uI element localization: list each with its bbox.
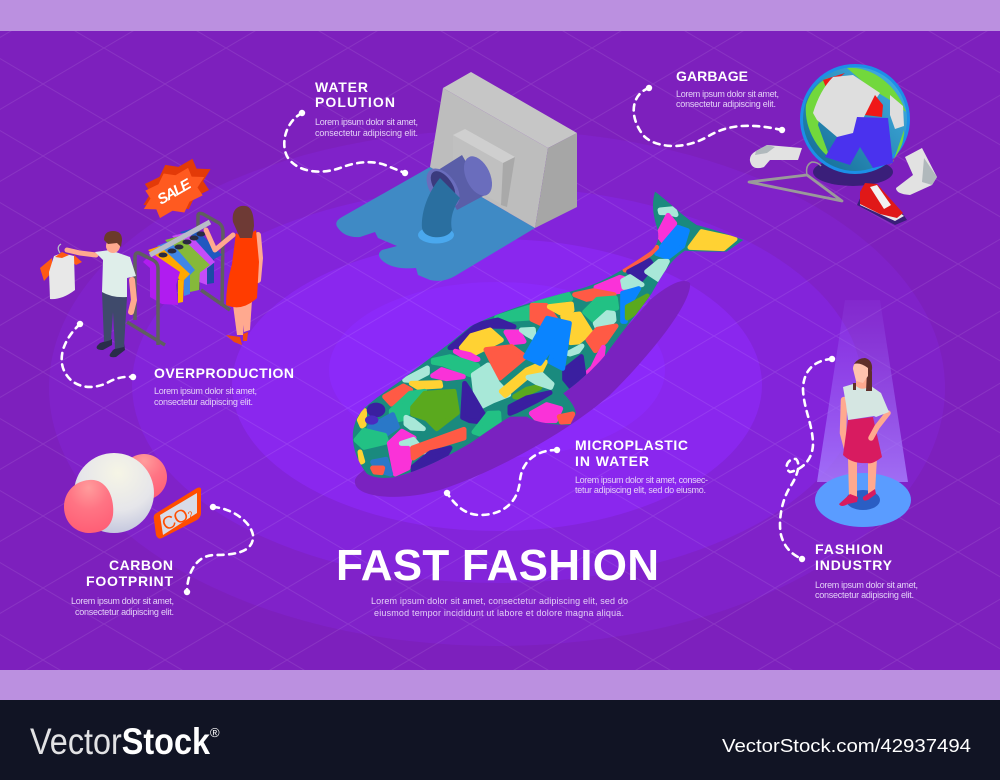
clothes rack [127, 213, 230, 345]
man figure [67, 231, 136, 357]
body text line 2: consectetur adipiscing elit. [75, 607, 174, 617]
dashed connector [447, 450, 557, 515]
icon: CO2 sign [154, 488, 201, 539]
icon: hanger [749, 162, 842, 201]
woman figure [206, 206, 260, 345]
heading: FASHION [815, 541, 883, 557]
icon: sale starburst: SALE [154, 175, 195, 208]
top band [0, 0, 1000, 31]
spotlight floor [815, 473, 911, 527]
heading line 2: INDUSTRY [815, 557, 893, 573]
panel: fashion industry [780, 300, 918, 600]
icon: sale starburst [132, 147, 222, 229]
icon: left sock [750, 145, 802, 168]
body text line 2: consectetur adipiscing elit. [815, 590, 914, 600]
panel: carbon footprint [64, 453, 253, 617]
icon: right sock [896, 148, 937, 195]
body text: Lorem ipsum dolor sit amet, consec- [575, 475, 708, 485]
body text: Lorem ipsum dolor sit amet, [154, 386, 257, 396]
heading: CARBON [109, 557, 173, 573]
polluted water stream [418, 178, 460, 244]
icon: CO2 sign: CO2 [158, 502, 196, 535]
heading line 2: IN WATER [575, 453, 649, 469]
spotlight cone [817, 300, 908, 482]
footer url: VectorStock.com/42937494 [722, 736, 971, 756]
title body text: Lorem ipsum dolor sit amet, consectetur adipiscing elit, sed do [371, 596, 628, 606]
registered mark: ® [210, 725, 220, 740]
heading line 2: POLUTION [315, 94, 395, 110]
body text: Lorem ipsum dolor sit amet, [315, 117, 418, 127]
footer bar [0, 700, 1000, 780]
icon: sneaker [857, 183, 907, 225]
heading: GARBAGE [676, 68, 748, 84]
globe base shadow [813, 158, 893, 186]
heading: MICROPLASTIC [575, 437, 688, 453]
panel: garbage [634, 64, 937, 225]
body text: Lorem ipsum dolor sit amet, [815, 580, 918, 590]
whale of clothes [353, 192, 743, 478]
body text line 2: tetur adipiscing elit, sed do eiusmo. [575, 485, 706, 495]
icon: molecule [64, 453, 167, 533]
panel: overproduction [40, 147, 294, 407]
body text line 2: consectetur adipiscing elit. [676, 99, 776, 109]
panel: water pollution [284, 72, 577, 281]
body text line 2: consectetur adipiscing elit. [315, 128, 418, 138]
title body text line 2: eiusmod tempor incididunt ut labore et dolore magna aliqua. [374, 608, 624, 618]
body text: Lorem ipsum dolor sit amet, [676, 89, 779, 99]
woman figure [839, 358, 889, 506]
dashed connector [780, 359, 832, 559]
dashed connector [187, 507, 253, 592]
dashed connector [634, 88, 782, 146]
dashed connector [62, 324, 133, 387]
footer logo: VectorStock [30, 721, 210, 762]
heading line 2: FOOTPRINT [86, 573, 173, 589]
dashed connector [284, 113, 405, 173]
bottom band [0, 670, 1000, 700]
panel: microplastic whale [353, 192, 743, 515]
body text line 2: consectetur adipiscing elit. [154, 397, 253, 407]
icon: globe of clothes [800, 64, 910, 174]
title: FAST FASHION [336, 541, 659, 590]
heading: WATER [315, 79, 368, 95]
concrete block [430, 72, 577, 228]
water pool [336, 167, 535, 281]
held t-shirt [40, 244, 82, 299]
whale shadow [355, 281, 690, 497]
heading: OVERPRODUCTION [154, 365, 294, 381]
floor shadow [846, 490, 880, 510]
body text: Lorem ipsum dolor sit amet, [71, 596, 174, 606]
pipe [420, 152, 498, 213]
